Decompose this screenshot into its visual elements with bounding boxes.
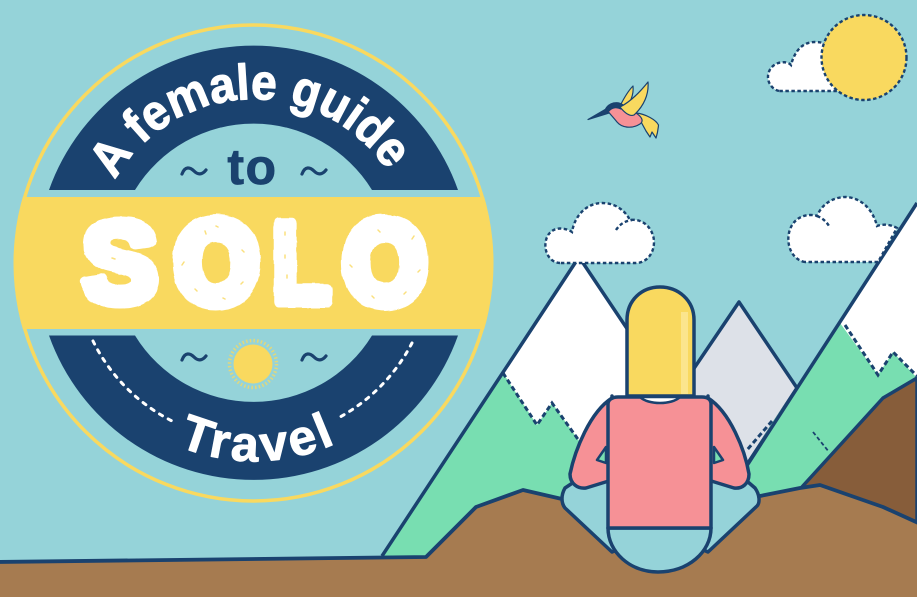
left leg xyxy=(562,480,640,552)
heading: to: to xyxy=(227,139,278,195)
head xyxy=(605,103,623,111)
ground xyxy=(0,485,917,597)
SOLO speckles xyxy=(112,226,420,299)
yellow banner xyxy=(0,197,510,329)
hair xyxy=(627,287,694,396)
hair highlight xyxy=(681,312,688,394)
left mountain outline xyxy=(382,257,640,556)
body xyxy=(606,103,642,127)
cloud behind sun xyxy=(768,42,850,91)
cloud right xyxy=(788,197,897,262)
cloud left xyxy=(545,203,654,263)
tail xyxy=(636,113,658,138)
heading: Travel: Travel xyxy=(187,411,333,462)
left mountain snow line xyxy=(503,373,580,442)
beak xyxy=(588,109,609,120)
bottom navy arc band xyxy=(49,336,458,480)
sun xyxy=(822,15,906,100)
top navy arc band xyxy=(49,46,458,190)
cloud left inner detail xyxy=(616,220,632,230)
icon: hummingbird xyxy=(588,82,658,138)
heading: SOLO: L xyxy=(272,200,330,327)
right mountain snow line xyxy=(845,325,917,376)
right mountain snow xyxy=(830,203,917,400)
dark brown hill xyxy=(801,378,917,540)
left mountain green slope xyxy=(382,373,640,565)
left mountain snow xyxy=(503,257,660,480)
front wing xyxy=(620,82,648,115)
left arm gap xyxy=(597,447,606,463)
small slope mark xyxy=(813,432,829,452)
right arm gap xyxy=(714,447,723,463)
heading: A female guide: A female guide xyxy=(93,62,404,180)
person sitting from behind xyxy=(562,287,759,572)
badge outer ring xyxy=(16,25,492,501)
heading: SOLO xyxy=(82,200,426,327)
heading: SOLO: O xyxy=(344,200,426,327)
tilde ornaments xyxy=(182,168,326,360)
mountains xyxy=(382,203,917,565)
shirt xyxy=(608,397,711,528)
clouds xyxy=(545,197,897,263)
back wing xyxy=(620,86,633,110)
middle mountain xyxy=(680,302,797,480)
middle mountain snow line xyxy=(747,421,772,450)
left arm xyxy=(570,396,612,488)
right mountain green slope xyxy=(745,323,917,560)
dashed road lines xyxy=(93,341,412,421)
small sun xyxy=(230,340,276,388)
heading: SOLO: S xyxy=(82,200,158,327)
neckline xyxy=(640,397,680,403)
cloud right inner detail xyxy=(817,216,829,226)
icon: sun and cloud top right xyxy=(768,15,906,100)
badge xyxy=(14,23,494,503)
heading: SOLO: O xyxy=(175,200,258,327)
right leg xyxy=(680,480,759,552)
lap xyxy=(608,528,711,572)
right arm xyxy=(708,396,749,488)
right mountain outline xyxy=(746,203,917,467)
